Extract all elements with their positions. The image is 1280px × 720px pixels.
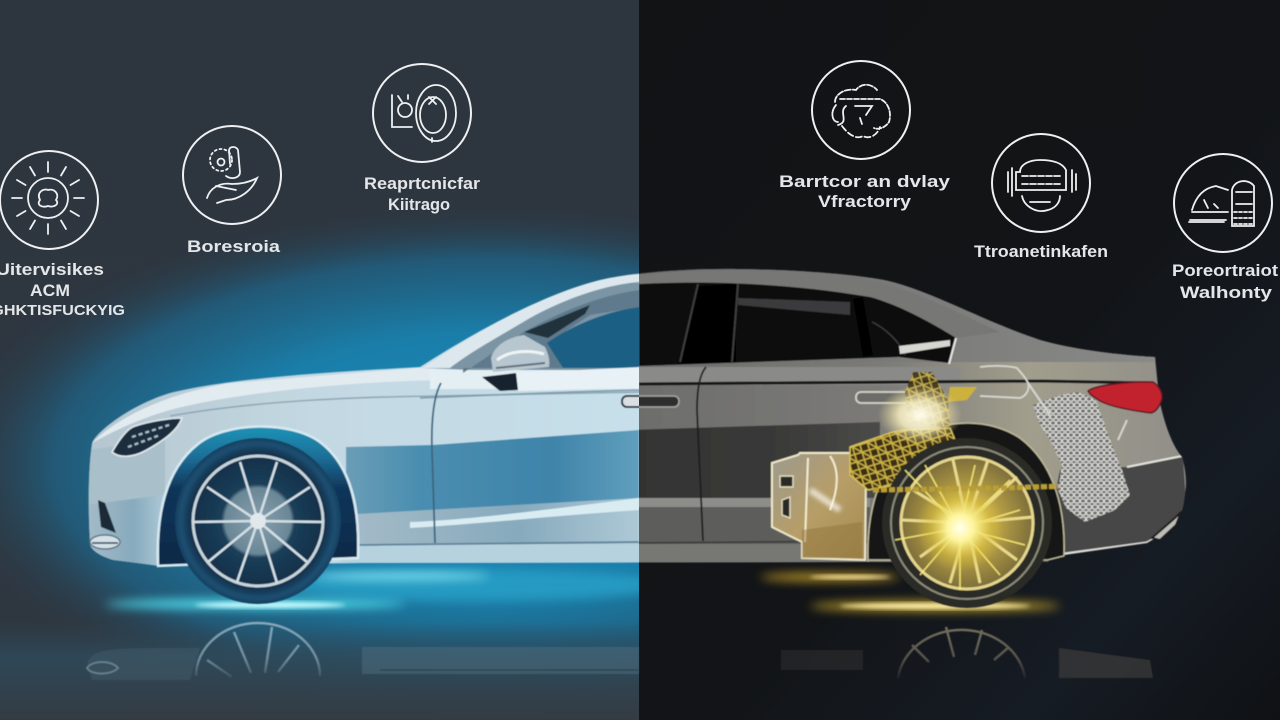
door handle left half — [620, 394, 639, 409]
label: right 3: Walhonty — [1180, 283, 1273, 302]
label: right 1: Vfractorry — [818, 192, 912, 211]
gold wheel spokes — [902, 460, 1033, 583]
label: left 1 — [0, 260, 125, 319]
ring icon: engine — [812, 61, 910, 159]
label: left 3: Reaprtcnicfar — [364, 174, 480, 193]
exhaust — [1152, 512, 1181, 540]
belt line — [630, 367, 960, 385]
shadow band — [630, 422, 880, 498]
label: right 1 — [779, 172, 951, 211]
label: right 1: Barrtcor an dvlay — [779, 172, 951, 191]
front wheel — [175, 438, 341, 604]
hood highlight — [92, 367, 445, 443]
floor glow: left — [105, 569, 670, 609]
icon group: right 1 — [779, 61, 951, 211]
side window — [547, 307, 640, 368]
door handle right half — [625, 396, 679, 407]
floor glow: right gold — [760, 573, 1060, 611]
rear lower bumper — [1040, 457, 1190, 565]
ring icon: gauge — [373, 64, 471, 162]
gold lattice gear assembly — [850, 372, 977, 490]
A-pillar and frame — [422, 274, 640, 370]
roof frame — [630, 270, 1000, 338]
front intake and fog lamp — [90, 500, 120, 549]
floor reflection: left car — [87, 623, 639, 680]
ring icon: machine — [1174, 154, 1272, 252]
front wheel arch — [158, 426, 358, 566]
label: right 3 — [1172, 261, 1278, 302]
ring icon: motor — [992, 134, 1090, 232]
ring icon: hand — [183, 126, 281, 224]
gold drive rod — [873, 485, 1103, 490]
rear door handle — [856, 392, 926, 403]
white engine flash — [878, 385, 962, 445]
silver mesh exhaust assembly — [1028, 383, 1130, 522]
panel: right dark background — [639, 0, 1280, 720]
wheel spokes — [193, 462, 323, 583]
mirror — [482, 335, 549, 391]
floor reflection: right car — [781, 627, 1153, 678]
belt strip — [516, 367, 640, 391]
icon group: right 2 — [974, 134, 1108, 261]
fuel door — [980, 366, 1029, 398]
icon group: left 3 — [364, 64, 480, 214]
rear wheel — [882, 438, 1052, 608]
side windows — [639, 283, 956, 366]
headlight — [112, 418, 182, 456]
icon group: left 2 — [183, 126, 281, 256]
label: right 3: Poreortraiot — [1172, 261, 1278, 280]
door gap — [697, 367, 706, 541]
icon group: right 3 — [1172, 154, 1278, 302]
car: left silver half — [85, 260, 652, 604]
car: right dark half — [625, 260, 1200, 608]
label: left 3 — [364, 174, 480, 214]
gold transmission housing — [772, 453, 866, 560]
ring icon: sun — [0, 151, 98, 249]
wheel starburst — [895, 465, 1025, 590]
label: left 2: Boresroia — [187, 237, 281, 256]
rear wheel arch — [868, 423, 1064, 562]
icon group: left 1 — [0, 151, 125, 319]
label: left 1: ACM — [30, 281, 70, 300]
car body left — [85, 260, 645, 570]
door gap — [432, 383, 441, 543]
label: right 2: Ttroanetinkafen — [974, 242, 1108, 261]
panel: left blue background — [0, 0, 639, 720]
label: left 3: Kiitrago — [388, 195, 450, 214]
tail light — [1088, 382, 1162, 413]
car body right — [630, 260, 1200, 570]
